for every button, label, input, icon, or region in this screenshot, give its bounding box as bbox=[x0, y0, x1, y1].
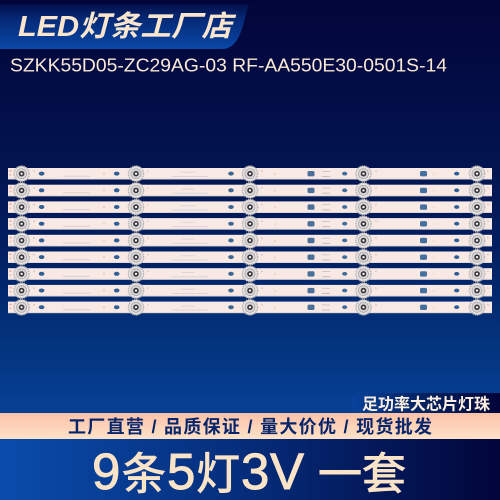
strip 2 bbox=[8, 183, 492, 198]
footer band: V bbox=[270, 443, 304, 500]
footer band: 条 bbox=[122, 450, 166, 499]
strip 8 bbox=[8, 283, 492, 298]
footer band: 3 bbox=[241, 443, 269, 500]
strip 4 bbox=[8, 216, 492, 231]
footer band: 一 bbox=[318, 450, 362, 499]
model numbers: SZKK55D05-ZC29AG-03 RF-AA550E30-0501S-14 bbox=[10, 56, 447, 76]
footer band: 套 bbox=[362, 450, 406, 499]
selling points band bbox=[0, 413, 500, 439]
footer band: 灯 bbox=[196, 450, 240, 499]
strip 6 bbox=[8, 250, 492, 265]
footer band: 9 bbox=[92, 443, 120, 500]
selling points band: 工厂直营 / 品质保证 / 量大价优 / 现货批发 bbox=[68, 416, 432, 437]
strip 9 bbox=[8, 300, 492, 315]
strip 3 bbox=[8, 200, 492, 215]
strip 7 bbox=[8, 266, 492, 282]
header banner bbox=[0, 4, 249, 49]
strip 5 bbox=[8, 233, 492, 248]
footer band bbox=[0, 439, 500, 500]
footer band: 5 bbox=[167, 443, 195, 500]
strip 1 bbox=[8, 166, 492, 181]
badge: full power chip: 足功率大芯片灯珠 bbox=[362, 394, 490, 414]
LED strips bbox=[8, 166, 492, 315]
shop title: LED灯条工厂店 bbox=[18, 11, 237, 43]
